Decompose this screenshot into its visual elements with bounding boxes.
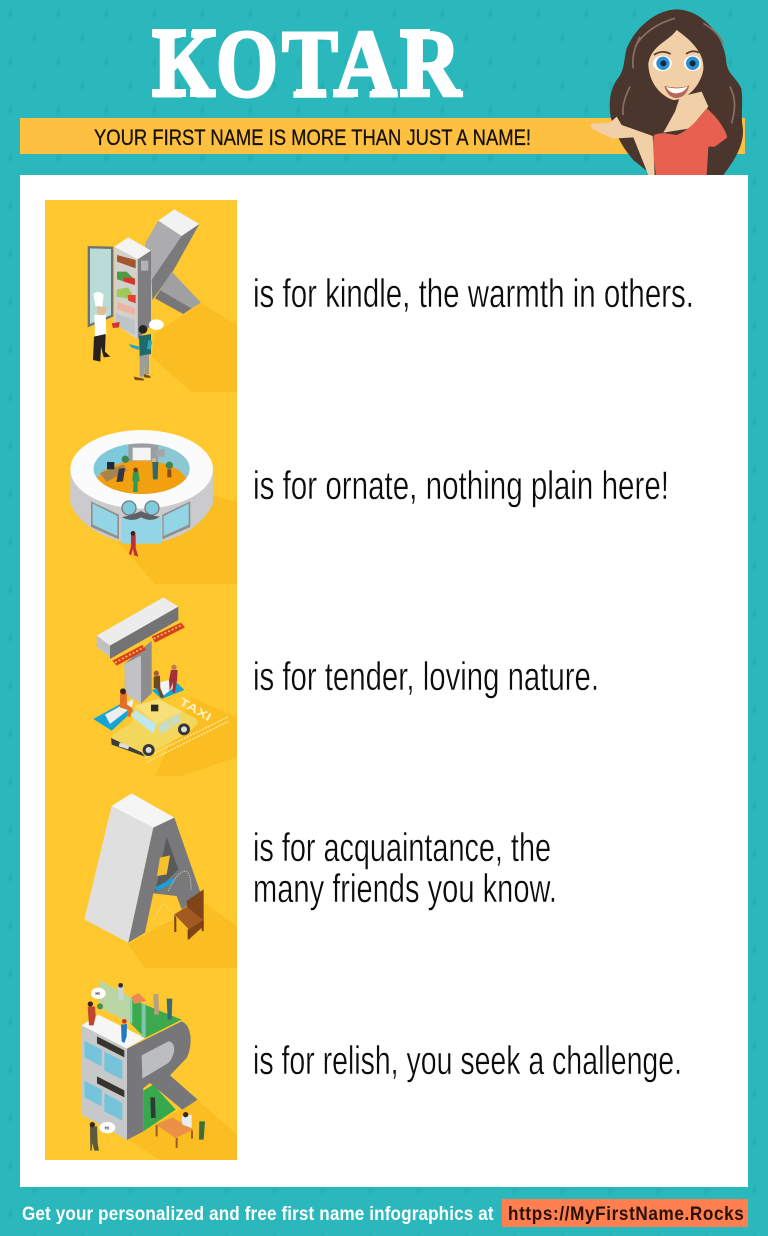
man with speech bubble xyxy=(129,319,164,381)
chair xyxy=(174,889,204,939)
people xyxy=(120,692,132,717)
title xyxy=(152,10,462,117)
woman walking xyxy=(129,535,138,557)
icon: cartoon woman xyxy=(590,9,743,175)
face xyxy=(648,30,703,100)
T letter xyxy=(124,641,152,703)
shirt xyxy=(653,108,727,175)
title: K xyxy=(153,10,215,117)
windows and signs xyxy=(84,1041,122,1121)
roof xyxy=(82,1015,145,1049)
people xyxy=(88,983,205,1151)
illustration: letter R with building xyxy=(82,981,237,1160)
arm and hand xyxy=(590,117,655,175)
people: HI xyxy=(95,991,100,996)
text: A lines xyxy=(253,826,557,911)
people in shop xyxy=(132,471,140,492)
title: R xyxy=(400,10,462,117)
fridge xyxy=(114,237,151,259)
chef xyxy=(93,292,120,362)
illustration: letter O with mustache shop xyxy=(70,430,237,584)
desk xyxy=(156,1112,193,1148)
text: A lines: is for acquaintance, the xyxy=(253,826,551,870)
main white panel xyxy=(20,175,748,1187)
eyes xyxy=(653,56,672,71)
illustration: letter A with chair xyxy=(84,793,237,968)
plaza xyxy=(93,702,133,731)
title: A xyxy=(334,10,397,117)
footer link badge: https://MyFirstName.Rocks xyxy=(508,1203,744,1224)
text: A lines: many friends you know. xyxy=(253,867,557,911)
illustration: letter K with fridge xyxy=(88,209,237,392)
yellow illustration column xyxy=(45,200,237,1160)
title: T xyxy=(282,10,338,117)
mouth xyxy=(664,85,689,98)
taxi xyxy=(111,699,198,757)
illustration: letter T with taxi xyxy=(93,597,237,776)
text: T line: is for tender, loving nature. xyxy=(253,655,599,699)
TAXI ground text: TAXI xyxy=(177,696,213,724)
subtitle banner xyxy=(20,118,745,154)
title: O xyxy=(216,10,278,117)
footer call to action: Get your personalized and free first name infographics at xyxy=(22,1203,494,1224)
glasses and mustache xyxy=(122,501,160,520)
R front face xyxy=(127,1021,198,1140)
left face xyxy=(82,1025,127,1140)
people: HI xyxy=(105,1125,109,1130)
subtitle banner: YOUR FIRST NAME IS MORE THAN JUST A NAME! xyxy=(94,125,531,150)
